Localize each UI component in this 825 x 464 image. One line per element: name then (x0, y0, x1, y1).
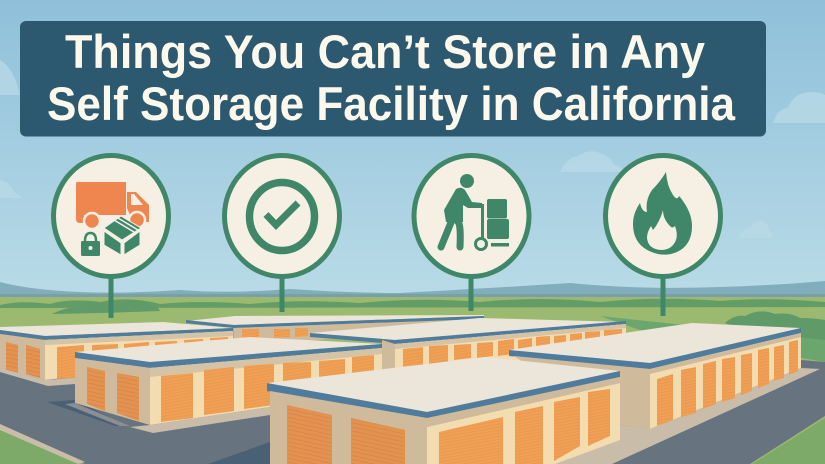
clouds (0, 60, 825, 238)
icon: delivery truck (76, 182, 149, 229)
title banner (20, 21, 766, 136)
distant mountains (0, 281, 825, 298)
asphalt roads (0, 360, 825, 464)
building: right row (509, 323, 820, 464)
icon: padlock (81, 233, 100, 256)
sign: flame (606, 156, 720, 316)
icon: check (266, 203, 298, 225)
icon: hand truck and boxes (476, 199, 509, 250)
building: left row (0, 322, 233, 386)
title line 1: Things You Can’t Store in Any (65, 25, 705, 78)
building: back centre row (310, 318, 626, 372)
icon: flame (633, 172, 692, 255)
building: front row (267, 357, 620, 464)
sign: person with hand truck (414, 156, 529, 311)
building: far back row (186, 315, 484, 345)
building: middle left row (75, 337, 382, 433)
sign: check mark (224, 156, 340, 312)
sign: truck, box and lock (54, 156, 168, 318)
icon: worker (441, 174, 482, 247)
title line 2: Self Storage Facility in California (47, 77, 736, 130)
sky background (0, 0, 825, 300)
icon: box (104, 216, 141, 255)
green fields (0, 294, 825, 464)
